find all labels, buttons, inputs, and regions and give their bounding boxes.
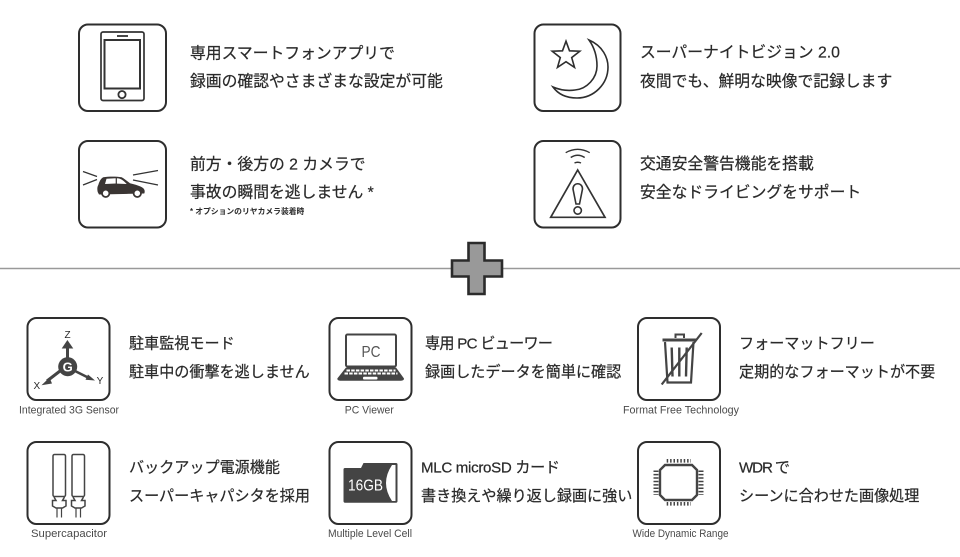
text: WDR description: [739, 460, 919, 505]
panel: super night vision: [534, 24, 892, 111]
icon: supercapacitors: [28, 442, 110, 524]
text: PC viewer description: 専用 PC ビューワー: [425, 336, 553, 352]
panel: PC viewer: [330, 318, 621, 416]
icon: car with headlights: [79, 141, 166, 228]
text: format free description: 定期的なフォーマットが不要: [739, 364, 935, 381]
text: night vision description: 夜間でも、鮮明な映像で記録します: [640, 72, 892, 90]
text: parking monitor description: [129, 336, 310, 381]
icon: 3G sensor axes: X: [33, 381, 40, 392]
panel: smartphone app: [79, 24, 443, 111]
text: smartphone app description: 録画の確認やさまざまな設定が可能: [190, 72, 443, 91]
text: safety warning description: 交通安全警告機能を搭載: [640, 155, 814, 173]
icon: processor chip: [638, 442, 720, 524]
icon: 16GB microSD card: [330, 442, 412, 524]
panel: format free: [623, 318, 935, 416]
text: parking monitor description: 駐車監視モード: [129, 336, 235, 352]
icon: plus sign: [452, 243, 502, 294]
text: backup power description: [129, 460, 310, 505]
text: two camera description: 前方・後方の 2 カメラで: [190, 156, 366, 174]
panel: front and rear cameras: [79, 141, 374, 228]
text: microSD description: MLC microSD カード: [421, 460, 560, 476]
panel: parking monitor: [19, 318, 310, 416]
text: smartphone app description: 専用スマートフォンアプリで: [190, 44, 395, 62]
text: microSD description: 書き換えや繰り返し録画に強い: [421, 488, 632, 505]
caption: PC Viewer: PC Viewer: [345, 404, 394, 416]
text: WDR description: WDR で: [739, 460, 790, 476]
icon: laptop: PC: [362, 344, 380, 361]
icon: smartphone: [79, 24, 166, 111]
text: format free description: [739, 336, 935, 381]
text: PC viewer description: [425, 336, 621, 381]
icon: 3G sensor axes: [28, 318, 110, 400]
text: format free description: フォーマットフリー: [739, 336, 875, 352]
panel: backup power: [28, 442, 310, 540]
text: parking monitor description: 駐車中の衝撃を逃しません: [129, 364, 310, 381]
caption: Supercapacitor: Supercapacitor: [31, 528, 107, 540]
text: night vision description: スーパーナイトビジョン 2.0: [640, 44, 840, 62]
icon: warning triangle with signal: [534, 141, 620, 228]
footnote: optional rear camera: * オプションのリヤカメラ装着時: [190, 206, 305, 216]
panel: WDR: [632, 442, 919, 540]
text: backup power description: スーパーキャパシタを採用: [129, 488, 310, 505]
text: PC viewer description: 録画したデータを簡単に確認: [425, 363, 621, 381]
text: two camera description: [190, 156, 374, 201]
text: backup power description: バックアップ電源機能: [129, 460, 280, 476]
icon: 16GB microSD card: 16GB: [348, 478, 383, 494]
icon: 3G sensor axes: Z: [64, 330, 71, 341]
text: WDR description: シーンに合わせた画像処理: [739, 488, 919, 505]
caption: Integrated 3G Sensor: Integrated 3G Sensor: [19, 404, 119, 416]
caption: Format Free Technology: Format Free Technology: [623, 404, 739, 416]
icon: laptop: [330, 318, 412, 400]
panel: traffic safety warning: [534, 141, 861, 228]
text: two camera description: 事故の瞬間を逃しません *: [190, 183, 374, 201]
caption: Multiple Level Cell: Multiple Level Cell: [328, 528, 412, 540]
icon: 3G sensor axes: G: [63, 359, 73, 374]
text: night vision description: [640, 44, 892, 90]
text: smartphone app description: [190, 44, 443, 91]
icon: crossed-out trash can: [638, 318, 720, 400]
text: safety warning description: 安全なドライビングをサポート: [640, 183, 861, 201]
panel: MLC microSD card: [328, 442, 632, 540]
caption: Wide Dynamic Range: Wide Dynamic Range: [632, 528, 728, 540]
text: microSD description: [421, 460, 632, 505]
text: safety warning description: [640, 155, 861, 201]
icon: moon and star: [534, 24, 620, 111]
icon: 3G sensor axes: Y: [97, 376, 104, 387]
